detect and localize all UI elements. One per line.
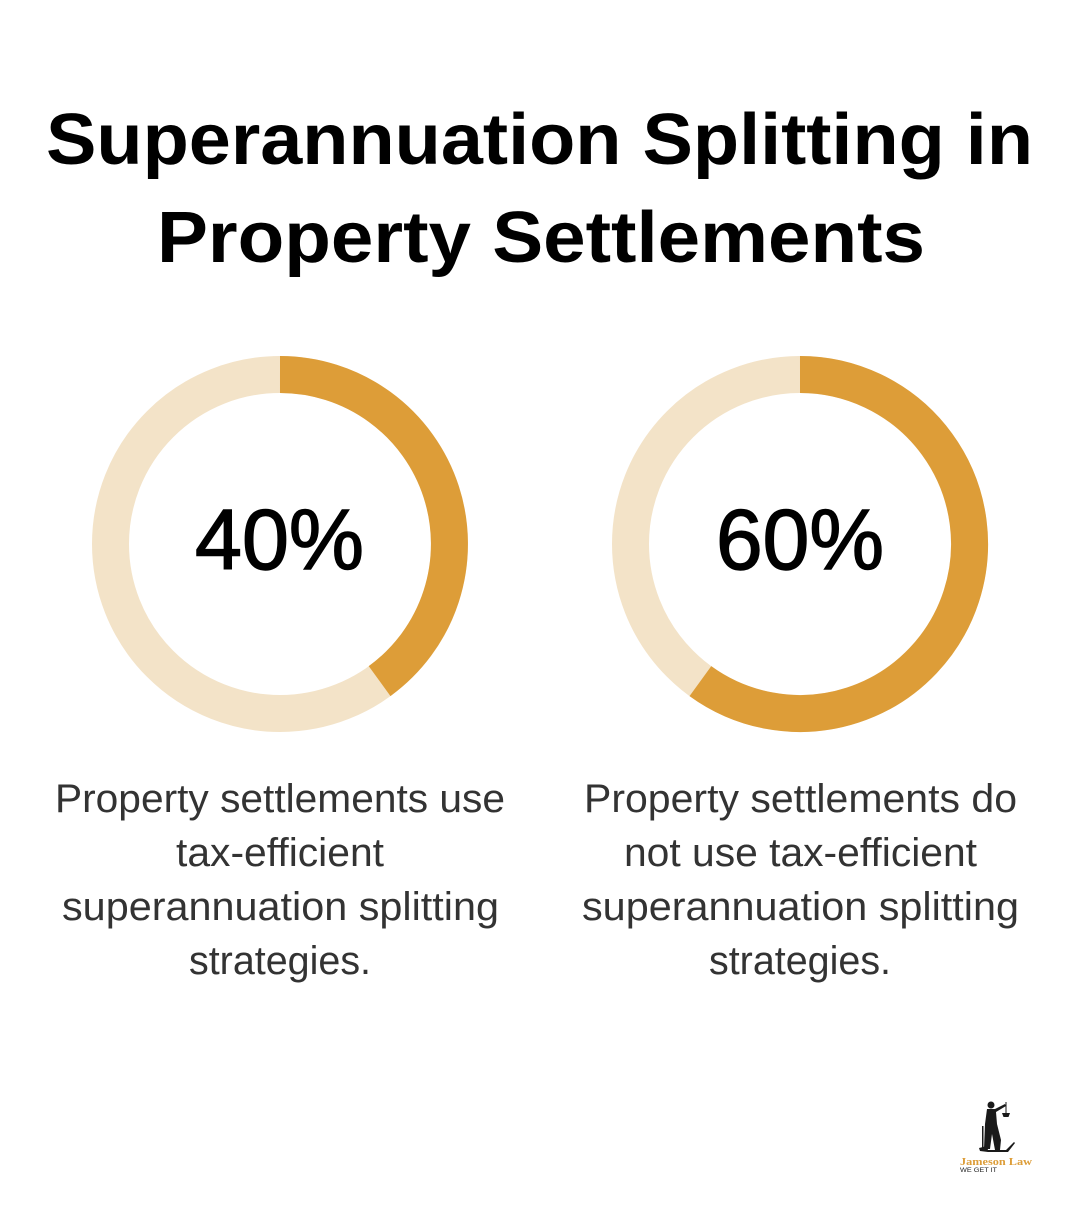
description: 60%: strategies. [709, 939, 891, 983]
description: 40% [55, 777, 505, 983]
description: 40%: strategies. [189, 939, 371, 983]
title: Property Settlements [157, 198, 925, 278]
description: 40%: tax-efficient [176, 831, 384, 875]
description: 40%: superannuation splitting [62, 885, 499, 929]
donut chart: 60% [630, 374, 970, 714]
panel: 40% use splitting [55, 374, 505, 983]
description: 60% [582, 777, 1019, 983]
logo: Jameson Law [960, 1102, 1032, 1174]
title [46, 100, 1033, 278]
description: 40%: Property settlements use [55, 777, 505, 821]
description: 60%: superannuation splitting [582, 885, 1019, 929]
value: 60%: 60% [716, 493, 884, 588]
panel: 60% do not use splitting [582, 374, 1019, 983]
icon: lady justice [979, 1102, 1015, 1152]
value: 40%: 40% [195, 493, 364, 588]
title: Superannuation Splitting in [46, 100, 1033, 180]
logo wordmark: Jameson Law [960, 1156, 1032, 1168]
description: 60%: Property settlements do [584, 777, 1017, 821]
description: 60%: not use tax-efficient [624, 831, 977, 875]
donut chart: 40% [110, 374, 450, 714]
logo tagline: WE GET IT [960, 1167, 997, 1174]
